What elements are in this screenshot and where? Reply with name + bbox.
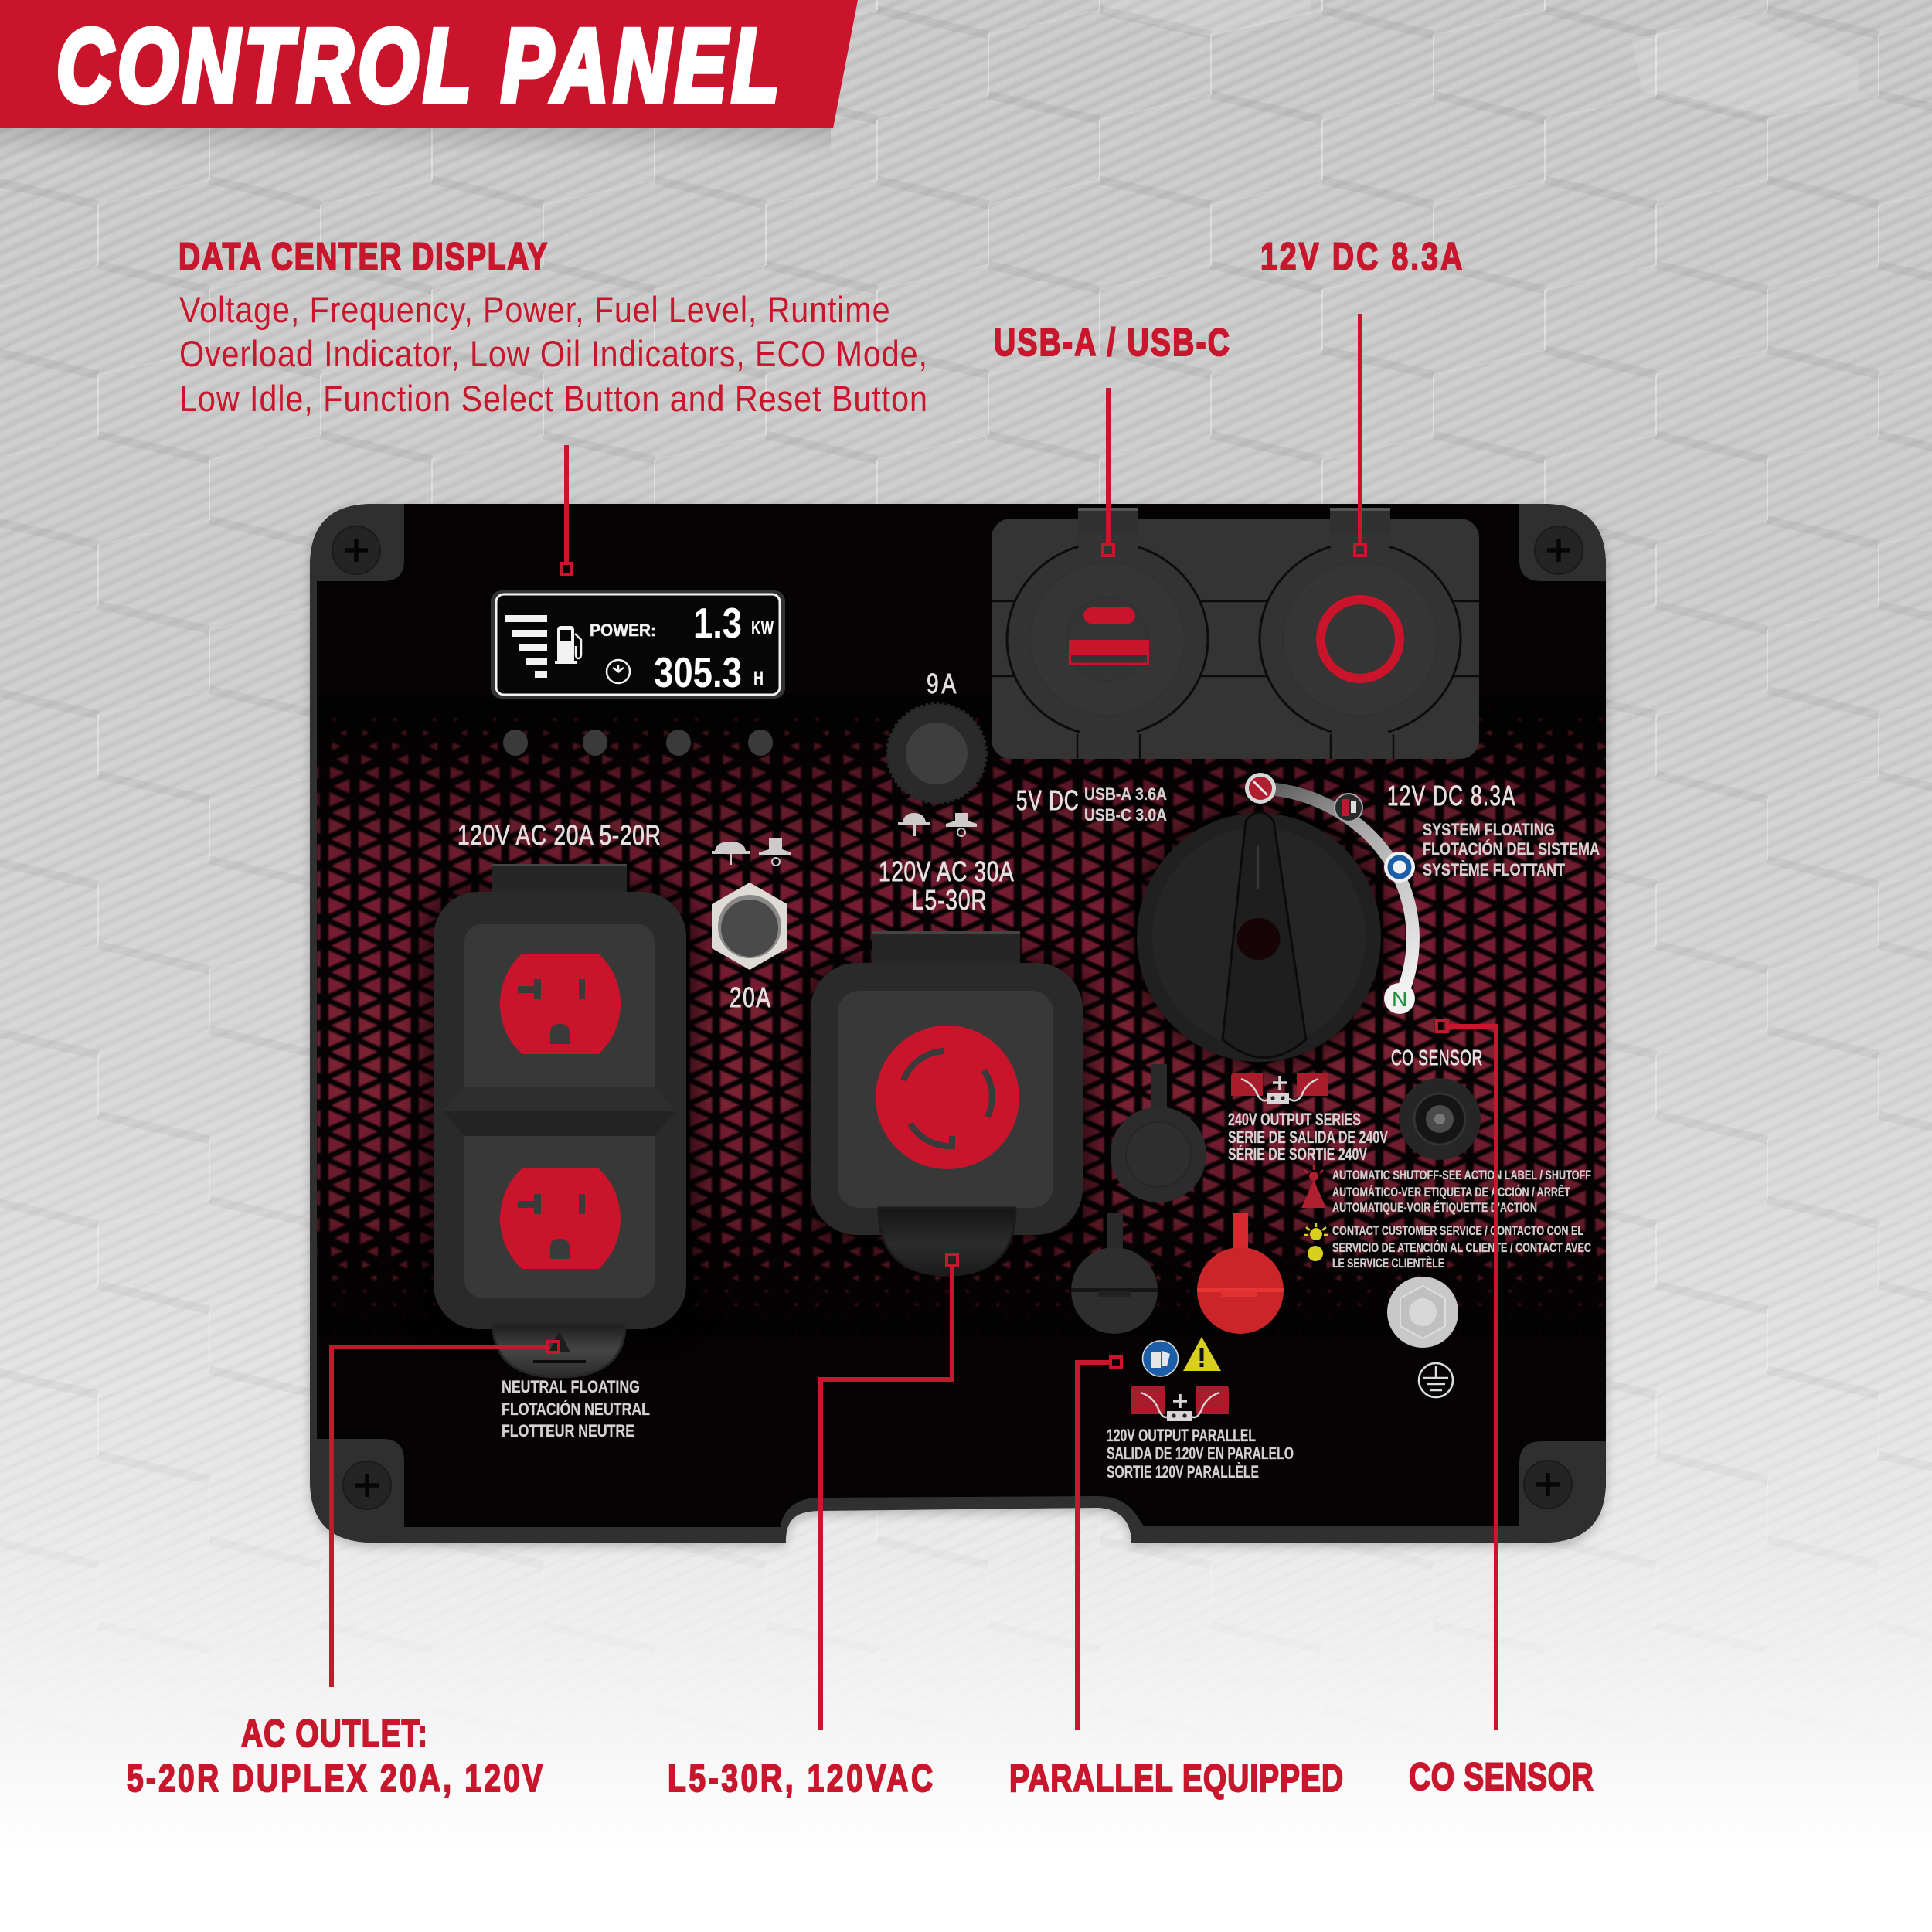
icon: ground symbol <box>1419 1363 1453 1397</box>
screw: top right <box>1535 526 1583 574</box>
label: 120V AC 30A L5-30R: L5-30R <box>912 885 987 916</box>
callout: L5-30R <box>821 1254 957 1730</box>
USB-C port <box>1083 607 1135 624</box>
label: 12V DC and system floating: 12V DC 8.3A <box>1387 781 1515 811</box>
label: 120V AC 20A 5-20R: 120V AC 20A 5-20R <box>457 820 661 851</box>
callout: 12V DC <box>1355 314 1366 556</box>
screw: bottom right <box>1524 1461 1572 1509</box>
corner tabs <box>305 498 1611 1546</box>
dial marker: N: N <box>1392 987 1407 1011</box>
label: 120V AC 30A L5-30R <box>879 856 1014 916</box>
data center description <box>179 291 927 420</box>
data center description: Voltage, Frequency, Power, Fuel Level, Runtime <box>179 291 890 331</box>
label: 12V DC and system floating: FLOTACIÓN DEL SISTEMA <box>1423 839 1600 859</box>
neutral floating text: NEUTRAL FLOATING <box>502 1377 640 1396</box>
CO sensor: CO SENSOR <box>1391 1046 1482 1070</box>
data center LCD display: 1.3 <box>693 599 742 647</box>
neutral floating text: FLOTTEUR NEUTRE <box>502 1421 634 1440</box>
label: parallel equipped: PARALLEL EQUIPPED <box>1009 1756 1343 1800</box>
icon: fuel pump <box>555 626 581 664</box>
240V output icon and text: SERIE DE SALIDA DE 240V <box>1228 1128 1388 1147</box>
data center description: Overload Indicator, Low Oil Indicators, ECO Mode, <box>179 335 927 375</box>
label: 120V AC 30A L5-30R: 120V AC 30A <box>879 856 1014 887</box>
parallel port cap: red <box>1197 1213 1284 1334</box>
breaker knob 9A <box>887 668 986 836</box>
label: AC outlet <box>127 1711 543 1800</box>
dial marker: N <box>1384 983 1415 1014</box>
heading: usb ports: USB-A / USB-C <box>994 320 1230 364</box>
warning: automatic shutoff: AUTOMATIC SHUTOFF-SEE ACTION LABEL / SHUTOFF <box>1332 1168 1591 1182</box>
label: AC outlet: AC OUTLET: <box>241 1711 427 1755</box>
data center LCD display: H <box>753 668 764 689</box>
parallel port cap: black <box>1071 1213 1158 1334</box>
label: 5V DC USB ratings <box>1016 784 1167 825</box>
triangular red mesh <box>317 693 1606 1345</box>
240V output icon and text <box>1228 1073 1388 1164</box>
label: L5-30R: L5-30R, 120VAC <box>668 1756 933 1800</box>
data center LCD display <box>491 590 785 699</box>
dial marker: system floating <box>1384 852 1415 883</box>
data center LCD display: POWER: <box>590 621 656 640</box>
screw: top left <box>332 526 380 574</box>
ground bolt <box>1387 1277 1458 1348</box>
control panel body <box>305 498 1611 1549</box>
parallel port cap: upper <box>1111 1064 1206 1202</box>
label: 12V DC and system floating <box>1387 781 1600 879</box>
warning: automatic shutoff <box>1301 1165 1591 1215</box>
breaker knob 9A: 9A <box>927 668 957 699</box>
breaker button 20A <box>712 838 791 1013</box>
12V ring <box>1321 600 1400 679</box>
dial marker: off <box>1245 773 1276 804</box>
outlet bottom <box>500 1168 621 1269</box>
warning: contact customer service: SERVICIO DE ATENCIÓN AL CLIENTE / CONTACT AVEC <box>1332 1240 1591 1255</box>
label: AC outlet: 5-20R DUPLEX 20A, 120V <box>127 1756 543 1800</box>
callout: data center display <box>561 445 572 574</box>
CO sensor <box>1391 1046 1482 1160</box>
outlet top <box>500 954 621 1054</box>
warning: contact customer service <box>1304 1223 1591 1270</box>
data center LCD display: KW <box>751 617 774 639</box>
USB and 12V socket housing <box>992 508 1479 759</box>
heading: 12v dc: 12V DC 8.3A <box>1260 234 1462 278</box>
data center description: Low Idle, Function Select Button and Reset Button <box>179 379 927 420</box>
fuel and mode dial <box>1137 773 1415 1062</box>
housing shadows on mesh <box>421 804 1392 1337</box>
12V cap <box>1260 508 1461 759</box>
USB cap <box>1007 508 1208 759</box>
title banner <box>0 0 858 156</box>
L5-30R twist lock outlet <box>811 931 1083 1275</box>
warning: automatic shutoff: AUTOMÁTICO-VER ETIQUETA DE ACCIÓN / ARRÊT <box>1332 1185 1570 1199</box>
label: 5V DC USB ratings: 5V DC <box>1016 785 1079 816</box>
5-20R duplex outlet housing <box>434 864 686 1377</box>
callout: USB <box>1103 388 1114 556</box>
dial marker: fuel off <box>1335 794 1362 821</box>
callout: CO sensor <box>1437 1021 1496 1730</box>
icon: warning triangle <box>1183 1337 1221 1371</box>
dial knob <box>1137 812 1381 1062</box>
USB-A port <box>1069 640 1149 664</box>
breaker icons <box>898 813 977 836</box>
label: 5V DC USB ratings: USB-A 3.6A <box>1084 784 1167 804</box>
120V parallel icon and text <box>1107 1386 1294 1481</box>
icon: read manual <box>1142 1341 1178 1376</box>
twist lock tab <box>879 1208 1015 1275</box>
label: 12V DC and system floating: SYSTÈME FLOTTANT <box>1423 860 1565 879</box>
neutral floating tab <box>493 1324 625 1377</box>
label: CO sensor: CO SENSOR <box>1409 1754 1594 1798</box>
data center LCD display: 305.3 <box>654 648 742 696</box>
label: 5V DC USB ratings: USB-C 3.0A <box>1084 805 1167 825</box>
breaker button 20A: 20A <box>730 982 770 1013</box>
240V output icon and text: 240V OUTPUT SERIES <box>1228 1110 1361 1129</box>
120V parallel icon and text: SORTIE 120V PARALLÈLE <box>1107 1462 1259 1481</box>
fuel level bars <box>505 615 547 678</box>
warning: contact customer service: LE SERVICE CLIENTÈLE <box>1332 1256 1444 1270</box>
warning: automatic shutoff: AUTOMATIQUE-VOIR ÉTIQUETTE D'ACTION <box>1332 1200 1537 1215</box>
240V output icon and text: SÉRIE DE SORTIE 240V <box>1228 1145 1367 1164</box>
120V parallel icon and text: SALIDA DE 120V EN PARALELO <box>1107 1444 1294 1463</box>
dial arc <box>1260 788 1413 998</box>
callout: parallel <box>1077 1357 1121 1730</box>
120V parallel icon and text: 120V OUTPUT PARALLEL <box>1107 1426 1256 1445</box>
neutral floating text: FLOTACIÓN NEUTRAL <box>502 1400 650 1419</box>
indicator LEDs <box>503 730 773 756</box>
title text: CONTROL PANEL <box>56 9 779 124</box>
warning: contact customer service: CONTACT CUSTOMER SERVICE / CONTACTO CON EL <box>1332 1223 1583 1238</box>
neutral floating text <box>502 1377 650 1440</box>
callout: AC outlet <box>332 1342 559 1687</box>
heading: data center display: DATA CENTER DISPLAY <box>179 234 547 278</box>
label: 12V DC and system floating: SYSTEM FLOATING <box>1423 820 1555 839</box>
icon: clock <box>607 660 630 683</box>
screw: bottom left <box>343 1461 391 1509</box>
